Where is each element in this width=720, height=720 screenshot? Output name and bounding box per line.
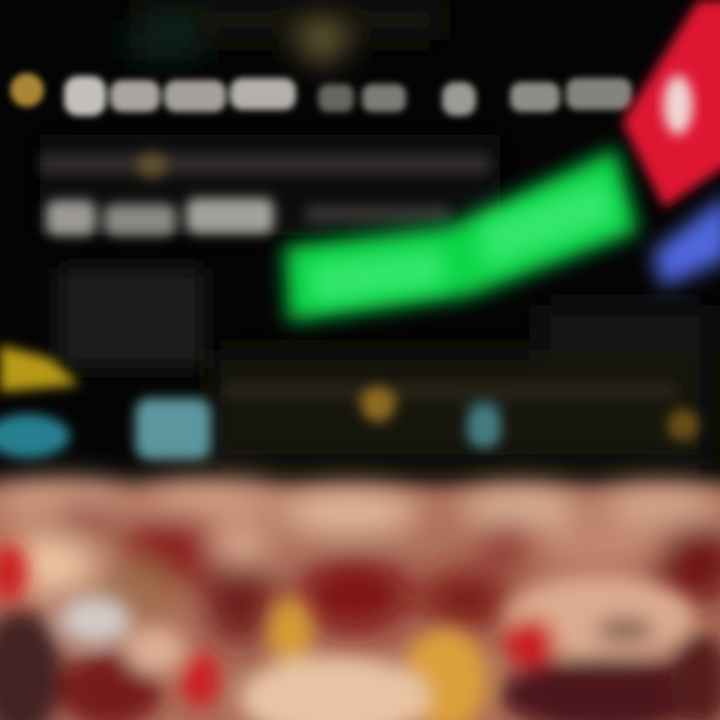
scoreboard subheading: grey text rows: [40, 151, 490, 236]
crowd: light and red patches: [0, 482, 720, 645]
crowd: base tone: [0, 484, 720, 720]
background glow: [40, 0, 710, 465]
flag: red, white and blue: [622, 0, 720, 288]
crowd: foreground heads: [0, 542, 720, 720]
lower signage lights: [0, 345, 699, 460]
dark panel: [58, 268, 204, 368]
green banner: [284, 148, 638, 322]
scoreboard heading: blurred white letters: [10, 73, 632, 116]
